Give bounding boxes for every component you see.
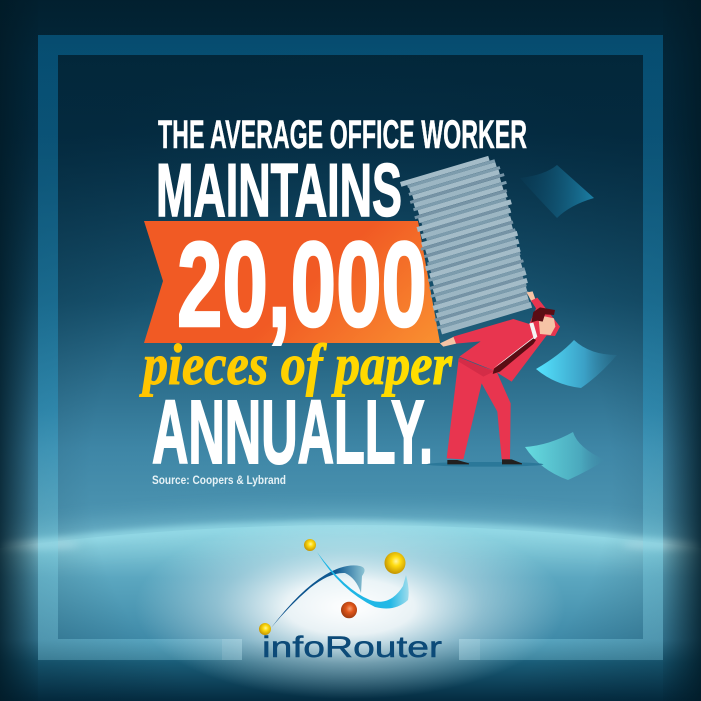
headline line 2: MAINTAINS [156, 148, 402, 232]
tie [493, 338, 536, 374]
script line: pieces of paper [139, 332, 452, 397]
legs [447, 358, 511, 459]
businessman [427, 291, 560, 467]
swoosh dark [271, 565, 365, 628]
hair [531, 307, 555, 322]
belt line [459, 357, 494, 377]
collar and shirt [493, 323, 537, 368]
ball top [304, 539, 316, 551]
back hand [440, 337, 457, 347]
wordmark: infoRouter [262, 631, 442, 664]
torso and arm [453, 298, 560, 382]
logo glow [135, 515, 565, 699]
ball left [259, 623, 271, 635]
shoes [447, 459, 522, 464]
floating sheet top [520, 165, 594, 218]
paper stack [394, 153, 543, 335]
infoRouter logo [259, 539, 442, 664]
headline line 4: ANNUALLY. [152, 383, 433, 483]
swoosh light [317, 552, 409, 608]
face [538, 315, 555, 335]
ball orange [341, 602, 357, 618]
floating sheet middle [536, 340, 617, 388]
raised hand [527, 291, 536, 302]
ball large [384, 552, 406, 574]
orange ribbon [144, 221, 440, 343]
big number: 20,000 [177, 216, 427, 352]
frame [38, 35, 663, 660]
source: Source: Coopers & Lybrand [152, 473, 286, 487]
floating sheet bottom [525, 432, 605, 480]
logo side tabs [222, 639, 480, 660]
shadow [427, 462, 543, 467]
